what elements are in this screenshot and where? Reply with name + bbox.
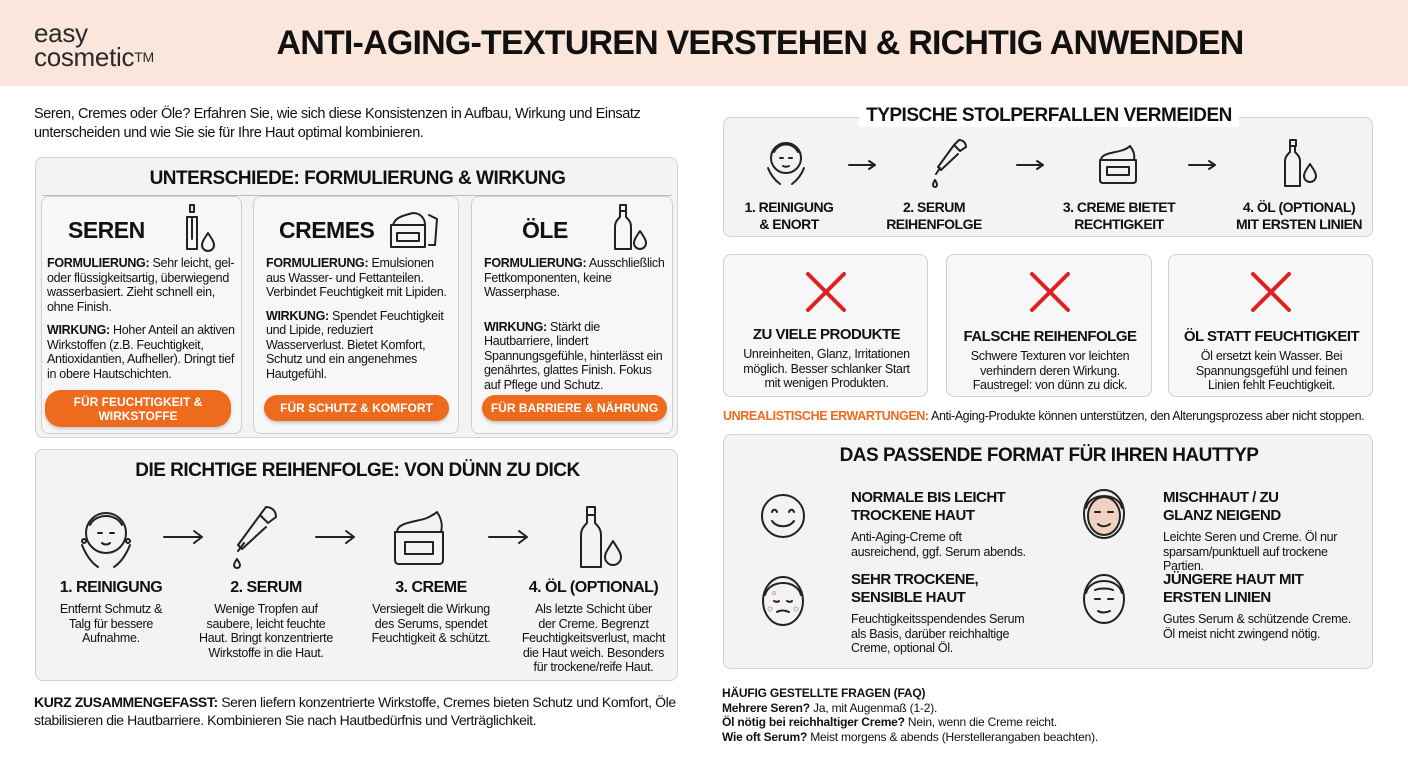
card: Öle (471, 196, 673, 434)
panel: Hauttyp: Leichte Seren und Creme. Öl nur (1163, 530, 1337, 544)
panel: Hauttyp: Anti-Aging-Creme oft (851, 530, 962, 544)
card: Seren: FORMULIERUNG: Sehr leicht, gel- oder flüssigkeitsartig, überwiegend wasserbasiert. Zieht schnell ein, ohne Finish. (47, 256, 234, 314)
panel: Hauttyp: GLANZ NEIGEND (1163, 507, 1281, 524)
button: WIRKSTOFFE (98, 408, 178, 422)
card: falsche Reihenfolge: verhindern deren Wirkung. (980, 364, 1120, 378)
intro text: Seren, Cremes oder Öle? Erfahren Sie, wie sich diese Konsistenzen in Aufbau, Wirkung und Einsatz unterscheiden und wie Sie sie für Ihre Haut optimal kombinieren. (34, 106, 640, 141)
step texts: Entfernt Schmutz & (60, 602, 162, 616)
button (45, 390, 231, 427)
panel: Stolperfallen steps: 4. ÖL (OPTIONAL) (1243, 199, 1355, 215)
step texts: Aufnahme. (82, 631, 140, 645)
arrow (163, 530, 203, 544)
title: ANTI-AGING-TEXTUREN VERSTEHEN & RICHTIG ANWENDEN (276, 24, 1244, 62)
panel: Hauttyp: SENSIBLE HAUT (851, 589, 965, 606)
card: Cremes: FÜR SCHUTZ & KOMFORT (280, 401, 433, 415)
panel: Hauttyp: TROCKENE HAUT (851, 507, 974, 524)
FAQ (722, 686, 1098, 744)
panel: Hauttyp: NORMALE BIS LEICHT (851, 489, 1005, 506)
logo: cosmeticTM (34, 42, 154, 72)
FAQ: HÄUFIG GESTELLTE FRAGEN (FAQ) (722, 686, 925, 700)
panel: Hauttyp (723, 434, 1373, 669)
card: Öle: FORMULIERUNG: Ausschließlich Fettkomponenten, keine Wasserphase. (484, 256, 665, 299)
card: falsche Reihenfolge: FALSCHE REIHENFOLGE (963, 328, 1136, 345)
card: Öl statt Feuchtigkeit: ÖL STATT FEUCHTIGKEIT (1184, 328, 1359, 345)
panel: Hauttyp: Partien. (1163, 559, 1204, 573)
panel: Reihenfolge: Versiegelt die Wirkung (372, 602, 490, 616)
card: Öl statt Feuchtigkeit (1168, 254, 1373, 397)
card: zu viele Produkte: mit wenigen Produkten. (764, 376, 889, 390)
panel: Hauttyp: ERSTEN LINIEN (1163, 589, 1271, 606)
icon: sensitive face (762, 576, 804, 626)
panel: Hauttyp: Creme, optional Öl. (851, 641, 953, 655)
unrealistic expectations note: UNREALISTISCHE ERWARTUNGEN: Anti-Aging-Produkte können unterstützen, den Alterungsprozess aber nicht stoppen. (723, 409, 1364, 423)
icon: dropper (233, 506, 277, 569)
icon: cream jar (390, 212, 438, 248)
panel: Hauttyp: sparsam/punktuell auf trockene (1163, 544, 1328, 558)
card: falsche Reihenfolge: Schwere Texturen vor leichten (971, 349, 1129, 363)
card: Seren: SEREN (68, 217, 145, 243)
panel: Reihenfolge: Feuchtigkeit & schützt. (372, 631, 490, 645)
header band (0, 0, 1408, 86)
card: Seren: WIRKUNG: Hoher Anteil an aktiven Wirkstoffen (z.B. Feuchtigkeit, Antioxidantien, Aufheller). Dringt tief in obere Hautschichten. (47, 323, 235, 380)
panel: Hauttyp: JÜNGERE HAUT MIT (1163, 571, 1303, 588)
icon: oil bottle (580, 506, 622, 568)
FAQ: Wie oft Serum? Meist morgens & abends (Herstellerangaben beachten). (722, 730, 1098, 744)
card: Cremes: CREMES (279, 217, 374, 243)
icon: cream jar (394, 511, 444, 565)
panel: Hauttyp: Gutes Serum & schützende Creme. (1163, 612, 1351, 626)
icon: combination face (1083, 489, 1125, 539)
icon: serum bottle (186, 204, 215, 252)
card: Cremes: FORMULIERUNG: Emulsionen aus Wasser- und Fettanteilen. Verbindet Feuchtigkeit mit Lipiden. (266, 256, 447, 299)
card: Öle: WIRKUNG: Stärkt die Hautbarriere, lindert Spannungsgefühle, hinterlässt ein genährtes, glattes Finish. Fokus auf Pflege und Schutz. (484, 320, 662, 392)
card: Öl statt Feuchtigkeit: Öl ersetzt kein Wasser. Bei (1201, 349, 1342, 363)
FAQ: Öl nötig bei reichhaltiger Creme? Nein, wenn die Creme reicht. (722, 715, 1057, 729)
panel: Reihenfolge: der Creme. Begrenzt (538, 616, 649, 630)
heading: UNTERSCHIEDE: FORMULIERUNG & WIRKUNG (150, 168, 565, 189)
step texts (60, 579, 162, 645)
heading: DIE RICHTIGE REIHENFOLGE: VON DÜNN ZU DICK (135, 460, 580, 481)
panel: Hauttyp: als Basis, darüber reichhaltige (851, 626, 1009, 640)
icon: face cleansing (81, 512, 131, 568)
panel: Reihenfolge: Feuchtigkeitsverlust, macht (522, 631, 665, 645)
panel: Stolperfallen steps: 2. SERUM (903, 199, 965, 215)
panel: Reihenfolge: 3. CREME (395, 579, 467, 596)
panel: Reihenfolge: Wirkstoffe in die Haut. (208, 646, 324, 660)
panel: Reihenfolge: für trockene/reife Haut. (534, 660, 653, 674)
card: Öle: FÜR BARRIERE & NÄHRUNG (491, 401, 658, 415)
panel: Stolperfallen steps: & ENORT (759, 216, 819, 232)
card: falsche Reihenfolge: Faustregel: von dünn zu dick. (973, 378, 1127, 392)
icon: face with lines (1083, 574, 1125, 624)
heading: DAS PASSENDE FORMAT FÜR IHREN HAUTTYP (840, 445, 1258, 466)
card: Öle: ÖLE (522, 217, 568, 243)
card: zu viele Produkte: möglich. Besser schlanker Start (743, 362, 910, 376)
panel: Hauttyp: Feuchtigkeitsspendendes Serum (851, 612, 1024, 626)
step texts: 1. REINIGUNG (60, 579, 162, 596)
logo: easy (34, 18, 88, 48)
panel: Reihenfolge: des Serums, spendet (375, 616, 487, 630)
card: Öl statt Feuchtigkeit: Spannungsgefühl und feinen (1196, 364, 1347, 378)
panel: Hauttyp: ausreichend, ggf. Serum abends. (851, 544, 1026, 558)
panel: Stolperfallen steps (723, 117, 1373, 237)
card: zu viele Produkte (723, 254, 928, 397)
panel: Reihenfolge: 2. SERUM (230, 579, 302, 596)
card: Öl statt Feuchtigkeit: Linien fehlt Feuchtigkeit. (1208, 378, 1335, 392)
panel: Hauttyp: Öl meist nicht zwingend nötig. (1163, 626, 1320, 640)
panel: Reihenfolge: Wenige Tropfen auf (214, 602, 318, 616)
panel: Reihenfolge: Als letzte Schicht über (535, 602, 652, 616)
icon: smiley (761, 494, 805, 538)
panel: Unterschiede (35, 157, 678, 438)
icon: oil bottle (614, 204, 647, 250)
card: falsche Reihenfolge (946, 254, 1152, 397)
panel: Reihenfolge: Haut. Bringt konzentrierte (199, 631, 333, 645)
heading: TYPISCHE STOLPERFALLEN VERMEIDEN (866, 105, 1232, 126)
card: Seren (41, 196, 242, 434)
card: zu viele Produkte: ZU VIELE PRODUKTE (753, 326, 900, 343)
logo (34, 18, 154, 72)
panel: Hauttyp: SEHR TROCKENE, (851, 571, 978, 588)
button: FÜR FEUCHTIGKEIT & (74, 394, 202, 408)
panel: Reihenfolge: saubere, leicht feuchte (207, 616, 325, 630)
panel: Reihenfolge: 4. ÖL (OPTIONAL) (529, 579, 658, 596)
panel: Reihenfolge: die Haut weich. Besonders (523, 646, 664, 660)
card: Cremes: WIRKUNG: Spendet Feuchtigkeit und Lipide, reduziert Wasserverlust. Bietet Komfort, Schutz und ein angenehmes Hautgefühl. (266, 308, 444, 380)
panel: Stolperfallen steps: MIT ERSTEN LINIEN (1236, 216, 1362, 232)
panel: Hauttyp: MISCHHAUT / ZU (1163, 489, 1278, 506)
step texts: Talg für bessere (69, 616, 153, 630)
panel: Stolperfallen steps: 1. REINIGUNG (745, 199, 833, 215)
panel: Reihenfolge (35, 449, 678, 681)
card: zu viele Produkte: Unreinheiten, Glanz, Irritationen (743, 347, 910, 361)
panel: Stolperfallen steps: RECHTIGKEIT (1074, 216, 1164, 232)
panel: Stolperfallen steps: REIHENFOLGE (886, 216, 982, 232)
panel: Stolperfallen steps: 3. CREME BIETET (1063, 199, 1175, 215)
summary: KURZ ZUSAMMENGEFASST: Seren liefern konzentrierte Wirkstoffe, Cremes bieten Schutz und Komfort, Öle stabilisieren die Hautbarriere. Kombinieren Sie nach Hautbedürfnis und Verträglichkeit. (34, 694, 676, 728)
card: Cremes (253, 196, 459, 434)
FAQ: Mehrere Seren? Ja, mit Augenmaß (1-2). (722, 700, 937, 714)
